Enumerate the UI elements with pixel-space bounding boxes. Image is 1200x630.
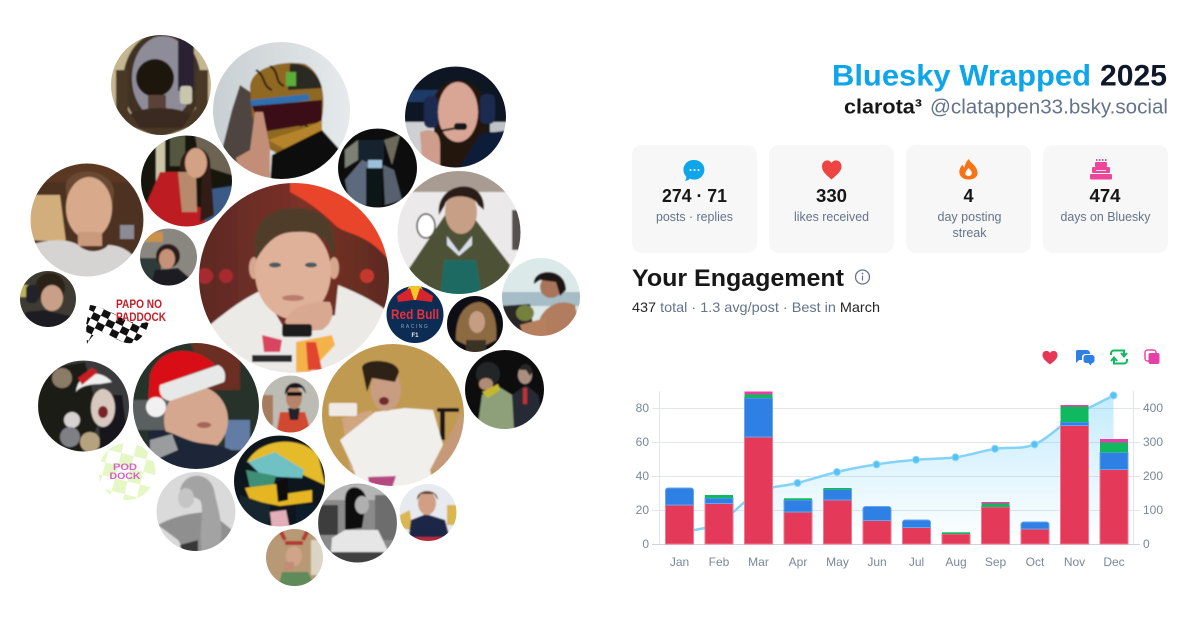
avatar: man drinking from coconut on boat [502,258,580,336]
heading: Your Engagement: Your Engagement [632,265,844,292]
month labels [670,555,1125,569]
avatar: yellow helmet driver [233,435,326,530]
avatar: black and white woman from behind [156,471,236,552]
avatar: driver in sunglasses and race suit [261,375,320,435]
panel: likes received stat [769,145,894,253]
display name: clarota³ [844,96,922,118]
avatar: Red Bull Racing logo [386,284,444,345]
left axis labels: 0 [642,537,649,551]
month labels: Sep [985,555,1006,569]
stat label: likes received [794,210,869,224]
right axis labels: 400 [1143,401,1163,415]
avatar: costumed face paint with Santa hat [37,360,131,455]
month labels: Dec [1103,555,1125,569]
logo text: Racing: RACING [401,324,429,330]
month labels: Feb [709,555,730,569]
avatar: man in green sweater with Snoopy [397,170,522,296]
cumulative line [679,395,1114,533]
month labels: Jun [867,555,887,569]
left axis labels: 40 [636,469,649,483]
header: title and handle [832,60,1168,118]
avatar: woman with headset on pit wall [404,66,510,170]
panel: day posting streak stat [906,145,1031,253]
avatar: black and white woman at table [317,483,398,565]
logo text: Paddock: PADDOCK [116,312,167,324]
right axis labels: 100 [1143,503,1163,517]
avatar: man in reindeer antlers and festive sweater [265,528,325,588]
left axis labels [636,401,649,551]
stat value: 274 · 71 [662,186,727,206]
title: Bluesky Wrapped 2025: 2025 [1100,60,1167,92]
avatar: main driver resting chin on hand [197,182,392,376]
bars: quotes [744,392,1128,504]
avatar: woman in ornate mirror [110,32,212,138]
icon: info [856,270,870,284]
avatar: driver pointing at gold helmet [212,41,352,185]
month labels: Mar [748,555,769,569]
avatar: streamer with headset [140,228,197,286]
icon: likes heart [1042,351,1058,364]
stat label: streak [952,226,987,240]
bars: likes [666,426,1128,544]
panel: posts and replies stat [632,145,757,253]
bars: reposts [705,394,1128,534]
stat label: posts · replies [656,210,733,224]
stat label: days on Bluesky [1060,210,1151,224]
logo text: F1: F1 [411,333,419,339]
icon: checkered flag [86,305,149,345]
chart: monthly engagement stacked bars with cumulative line [636,391,1163,569]
month labels: Nov [1064,555,1085,569]
logo: Pod Dock checkered badge [98,443,156,500]
title: Bluesky Wrapped 2025: Bluesky Wrapped [832,60,1091,92]
icon: flame [959,159,978,180]
logo text: Pod: POD [113,462,137,473]
month labels: Aug [945,555,967,569]
right axis labels: 200 [1143,469,1163,483]
panel: days on Bluesky stat [1043,145,1168,253]
avatar: toddler with Santa hat [132,342,260,472]
stat value: 4 [963,186,974,206]
avatar: two people in jackets at night [464,349,546,432]
legend: engagement types [1042,350,1160,366]
icon: heart [822,160,842,180]
avatar: woman in red dress [140,135,234,230]
logo text: Papo no: PAPO NO [116,299,162,311]
avatar: driver wearing headset [19,270,77,330]
month labels: Apr [789,555,807,569]
month labels: May [826,555,849,569]
bars: replies [666,398,1128,529]
month labels: Jan [670,555,689,569]
icon: birthday cake [1090,159,1112,180]
cumulative area [679,395,1114,544]
logo text: Red Bull: Red Bull [391,306,439,322]
left axis labels: 60 [636,435,649,449]
right axis labels: 300 [1143,435,1163,449]
avatar: smiling driver in team polo [399,483,457,542]
avatar: blonde singer with microphone [446,295,504,354]
stat value: 474 [1090,186,1120,206]
avatar: young man in white sweatshirt [30,162,144,280]
avatar: man in white t-shirt gesturing [321,343,466,490]
engagement summary text: 437 total · 1.3 avg/post · Best in March [632,299,880,315]
left axis labels: 80 [636,401,649,415]
right axis labels: 0 [1143,537,1150,551]
stat label: day posting [938,210,1002,224]
handle: @clatappen33.bsky.social [930,96,1168,118]
icon: reposts arrows [1111,350,1127,364]
month labels: Oct [1026,555,1045,569]
icon: replies bubbles [1076,350,1094,366]
icon: speech bubble [683,160,704,181]
chart grid and axes [652,391,1140,544]
left axis labels: 20 [636,503,649,517]
icon: quotes squares [1145,350,1160,364]
logo text: Dock: DOCK [110,471,141,482]
cumulative points [794,392,1117,486]
avatar: dark photo of person on podium [337,128,419,208]
right axis labels [1143,401,1163,551]
month labels: Jul [909,555,924,569]
stat value: 330 [816,186,847,206]
logo: Papo no Paddock with checkered flag [86,299,167,345]
panel: avatar bubble cluster [19,32,582,588]
